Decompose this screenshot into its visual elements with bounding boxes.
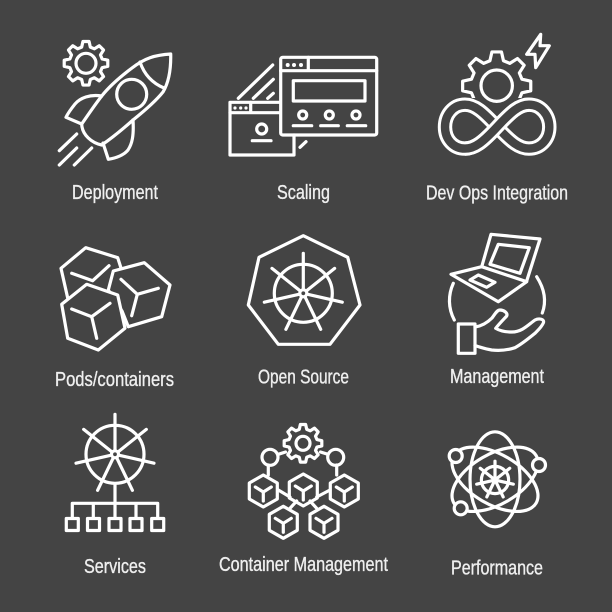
panel: performance <box>441 432 549 580</box>
label: Scaling: Scaling <box>277 182 330 204</box>
icon: helm wheel with network tree <box>66 414 164 530</box>
panel: scaling <box>230 57 377 204</box>
panel: container management <box>219 424 388 576</box>
label: Dev Ops Integration: Dev Ops Integration <box>426 182 568 204</box>
panel: management <box>449 234 545 388</box>
label: Container Management: Container Management <box>219 554 388 576</box>
label: Pods/containers: Pods/containers <box>55 369 174 391</box>
label: Services: Services <box>84 556 146 578</box>
label: Performance: Performance <box>451 558 543 580</box>
icon: browser windows <box>230 57 377 155</box>
icon: gear and connected cubes <box>249 424 358 538</box>
icon: gear, infinity and bolt <box>445 34 549 149</box>
icon: rocket with gear <box>59 42 171 165</box>
icon: atom with helm wheel <box>441 432 549 527</box>
infographic: nine icons on dark background <box>56 32 568 576</box>
panel: pods/containers <box>55 248 174 391</box>
panel: dev ops integration <box>426 34 568 204</box>
icon: laptop on hand <box>449 234 545 353</box>
label: Open Source: Open Source <box>258 366 349 388</box>
label: Management: Management <box>450 366 544 388</box>
panel: services <box>66 414 164 578</box>
icon: heptagon with helm wheel <box>248 236 360 344</box>
panel: deployment <box>59 42 171 204</box>
icon: three cubes <box>61 248 170 350</box>
panel: open source <box>248 236 360 388</box>
label: Deployment: Deployment <box>72 182 158 204</box>
